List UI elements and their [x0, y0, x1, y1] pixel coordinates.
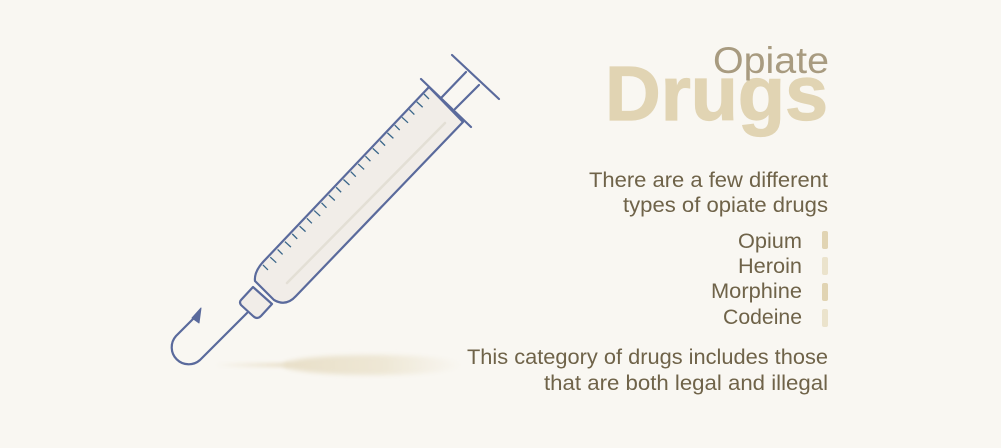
intro text: There are a few different [589, 169, 828, 192]
syringe barrel [255, 87, 463, 303]
list of opiate drugs: Morphine [711, 280, 802, 303]
syringe shadow [215, 355, 463, 375]
list markers [822, 231, 828, 327]
closing text [467, 346, 828, 395]
icon: syringe [172, 55, 499, 364]
barrel flange [421, 79, 471, 127]
needle with hook [172, 308, 247, 364]
list of opiate drugs: Heroin [738, 255, 802, 278]
list of opiate drugs [711, 230, 802, 329]
closing text: This category of drugs includes those [467, 346, 828, 369]
list of opiate drugs: Opium [738, 230, 802, 253]
closing text: that are both legal and illegal [544, 372, 828, 395]
list of opiate drugs: Codeine [723, 306, 802, 329]
syringe neck [240, 287, 272, 318]
title: Opiate: Opiate [713, 40, 829, 81]
plunger [442, 55, 499, 109]
title: Drugs: Drugs [605, 51, 828, 137]
intro text: types of opiate drugs [623, 194, 828, 217]
measurement ticks [263, 94, 429, 270]
barrel highlight [287, 123, 445, 283]
intro text [589, 169, 828, 217]
